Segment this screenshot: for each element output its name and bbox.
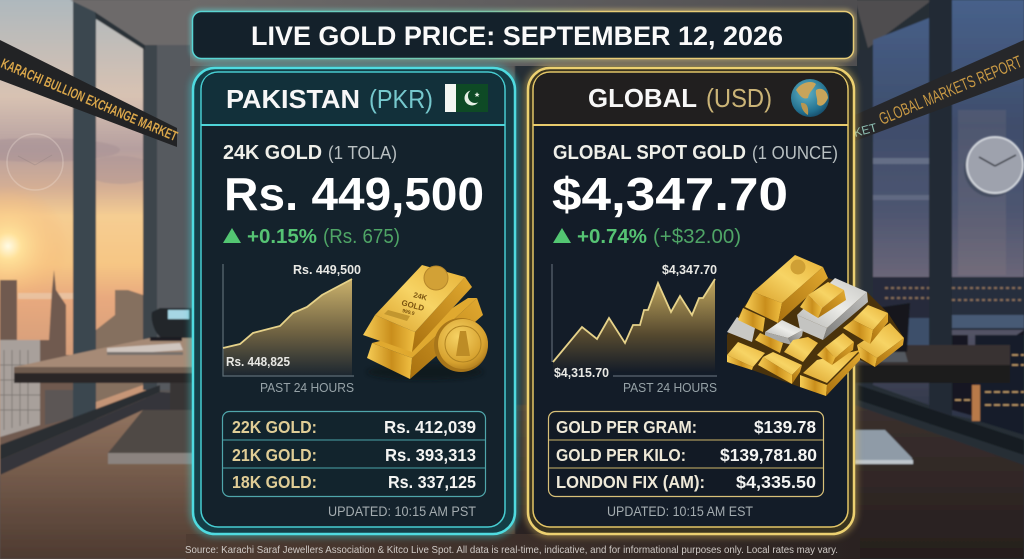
change indicator: PKR: +0.15% [247,226,317,248]
chart: USD 24 hours: $4,315.70 [554,366,609,380]
row: 22K: Rs. 412,039 [384,417,476,437]
sign: Karachi Bullion Exchange Market [0,40,180,147]
chart: PKR 24 hours: PAST 24 HOURS [260,380,354,395]
row: gold per kilo [556,445,817,465]
chart: USD 24 hours: PAST 24 HOURS [623,380,717,395]
icon: Pakistan flag [445,84,488,112]
label: 24K gold 1 tola: (1 TOLA) [328,143,397,163]
table: USD rates [548,412,824,496]
icon: gold bars and coin: 24K [412,290,429,303]
source footnote: Source: Karachi Saraf Jewellers Association & Kitco Live Spot. All data is real-time, indicative, and for informational purposes only. Local rates may vary. [185,544,838,556]
sign: Karachi Bullion Exchange Market: KARACHI BULLION EXCHANGE MARKET [0,55,180,144]
label: 24K gold 1 tola: 24K GOLD [223,142,322,164]
row: 22K [232,417,476,437]
heading: Pakistan: PAKISTAN [226,84,360,114]
row: gold per kilo: GOLD PER KILO: [556,445,686,465]
row: gold per gram: GOLD PER GRAM: [556,417,697,437]
panel header band [534,73,847,125]
chart: PKR 24 hours: Rs. 449,500 [293,263,361,277]
label: global spot gold 1 ounce: GLOBAL SPOT GOLD [553,142,746,164]
table: PKR karat rates [222,412,486,496]
row: 21K: Rs. 393,313 [385,445,476,465]
chart: PKR 24 hours: Rs. 448,825 [226,355,290,369]
chart: USD 24 hours: $4,347.70 [662,263,717,277]
background: dusk office right [515,0,1024,559]
heading: PKR: (PKR) [369,84,433,114]
change indicator: USD [553,226,741,248]
background: centre ceiling and floor [186,0,860,559]
icon: globe [791,79,829,117]
change indicator: PKR [223,226,400,248]
row: gold per kilo: $139,781.80 [720,445,817,465]
main price: USD: $4,347.70 [552,168,788,220]
row: 18K: Rs. 337,125 [388,472,476,492]
main price: PKR: Rs. 449,500 [224,168,484,220]
row: 18K: 18K GOLD: [232,472,317,492]
row: London fix [556,472,816,492]
label: global spot gold 1 ounce: (1 OUNCE) [752,143,838,163]
title banner [192,11,854,59]
change indicator: PKR: (Rs. 675) [323,226,400,248]
row: gold per gram: $139.78 [754,417,816,437]
background: sunset office left [0,0,525,559]
icon: gold bars and coin: 999.9 [401,308,415,317]
change indicator: USD: (+$32.00) [653,226,741,248]
chart: USD 24 hours [552,263,717,395]
updated time: USD: UPDATED: 10:15 AM EST [607,503,753,519]
row: London fix: LONDON FIX (AM): [556,472,705,492]
row: London fix: $4,335.50 [736,472,816,492]
row: 22K: 22K GOLD: [232,417,317,437]
panel header band [202,73,504,125]
row: 21K [232,445,476,465]
row: gold per gram [556,417,816,437]
icon: gold bars and coin [363,265,488,380]
sign: Global Markets Report [852,40,1024,141]
panel: Global (USD) [528,68,854,534]
chart: PKR 24 hours [223,263,361,395]
updated time: PKR: UPDATED: 10:15 AM PST [328,503,476,519]
title text: LIVE GOLD PRICE: SEPTEMBER 12, 2026 [251,21,783,51]
panel: Pakistan (PKR) [193,68,515,534]
row: 18K [232,472,476,492]
sign: Global Markets Report: KET [852,120,879,140]
wall clock: right [964,137,1023,197]
wall clock reflection: left [7,134,63,190]
icon: stack of gold and silver bars [727,255,904,396]
change indicator: USD: +0.74% [577,226,647,248]
heading: Global: GLOBAL [588,83,697,113]
icon: gold bars and coin: GOLD [400,298,425,313]
heading: USD: (USD) [706,83,772,113]
row: 21K: 21K GOLD: [232,445,317,465]
